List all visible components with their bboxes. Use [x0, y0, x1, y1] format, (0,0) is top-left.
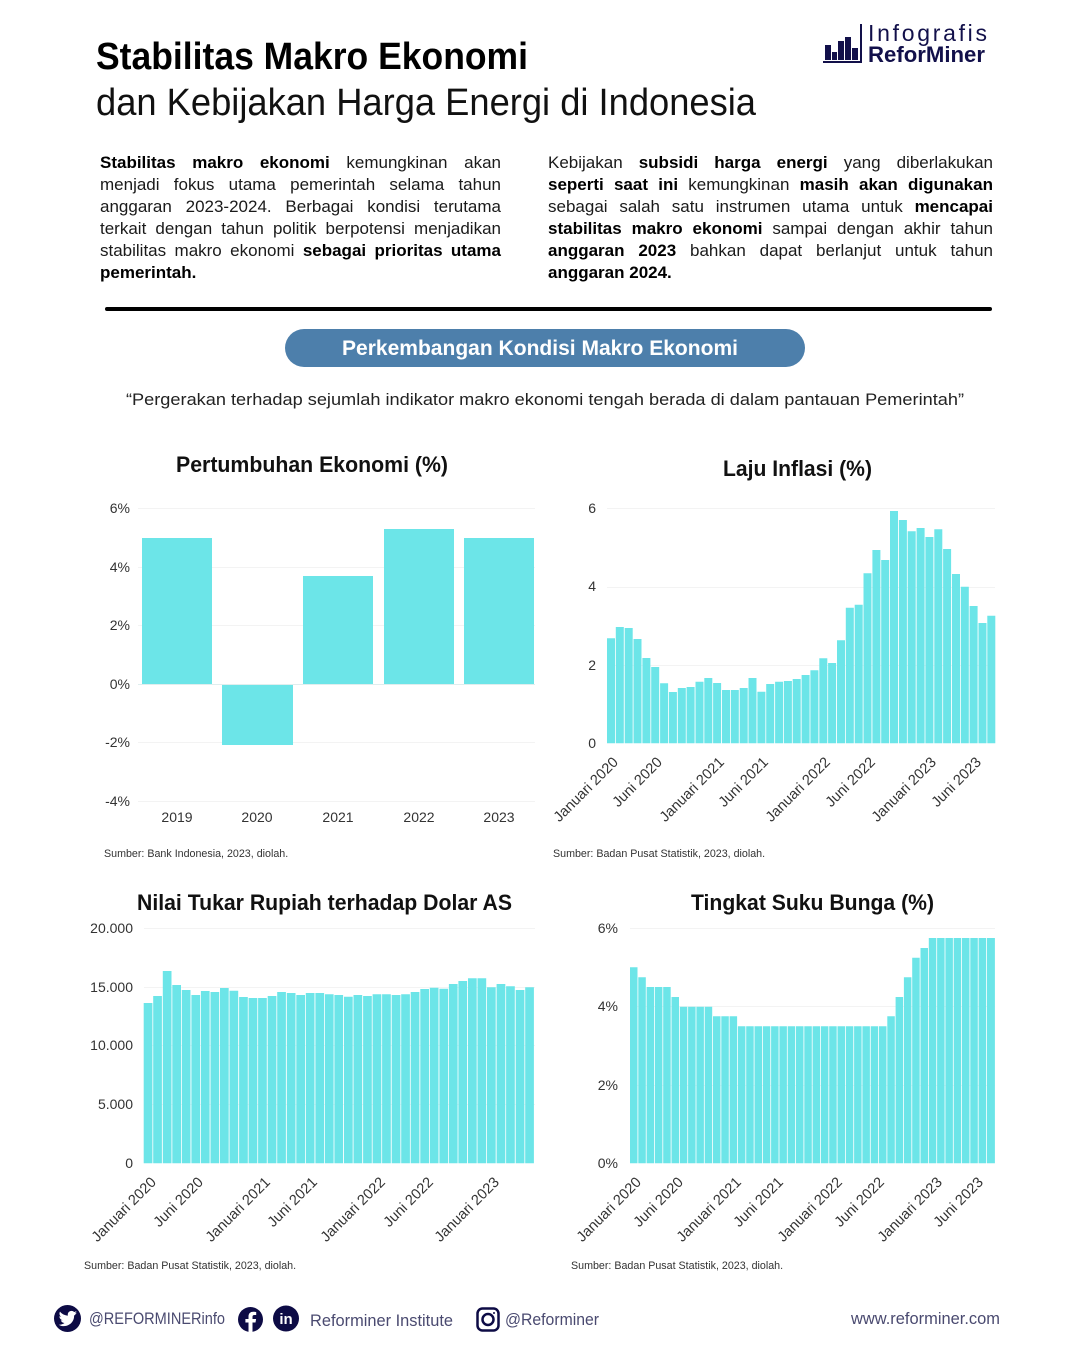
text block: left paragraph: menjadi fokus utama pemerintah selama tahun [100, 175, 501, 194]
text block: left paragraph: pemerintah. [100, 263, 196, 282]
logo: ReforMiner [823, 20, 987, 67]
x axis labels: Juni 2023 [929, 755, 985, 811]
handle: instagram: @Reforminer [505, 1310, 599, 1329]
y axis labels: 10.000 [90, 1037, 133, 1053]
bars [142, 529, 534, 745]
chart: Pertumbuhan Ekonomi [104, 452, 535, 860]
divider line [105, 307, 992, 311]
section subtitle quote: “Pergerakan terhadap sejumlah indikator makro ekonomi tengah berada di dalam pantauan Pemerintah” [126, 390, 964, 409]
chart: Nilai Tukar Rupiah [84, 890, 535, 1272]
x axis labels [551, 755, 985, 826]
y axis labels [90, 920, 133, 1171]
section heading pill [285, 329, 805, 367]
y axis labels: 6% [598, 920, 618, 936]
chart title: Tingkat Suku Bunga: Tingkat Suku Bunga (%) [691, 890, 934, 915]
x axis labels: Januari 2022 [775, 1175, 846, 1246]
x axis labels: 2019 [161, 809, 193, 825]
y axis labels: 5.000 [98, 1096, 133, 1112]
x axis labels [89, 1175, 503, 1246]
x axis labels: Juni 2020 [151, 1175, 207, 1231]
chart title: Pertumbuhan Ekonomi: Pertumbuhan Ekonomi (%) [176, 452, 448, 477]
x axis labels: Januari 2021 [203, 1175, 274, 1246]
x axis labels: Juni 2021 [716, 755, 772, 811]
x axis labels: 2022 [403, 809, 435, 825]
logo: ReforMiner: Infografis [868, 20, 987, 46]
y axis labels: 2 [588, 657, 596, 673]
x axis labels: Januari 2023 [432, 1175, 503, 1246]
x axis labels: 2021 [322, 809, 354, 825]
text block: right paragraph: seperti saat ini kemungkinan masih akan digunakan [548, 175, 993, 194]
y axis labels [105, 500, 130, 809]
source: Sumber: Bank Indonesia, 2023, diolah. [104, 848, 288, 860]
y axis labels [598, 920, 618, 1171]
icon: linkedin: in [279, 1311, 293, 1328]
y axis labels: 6 [588, 500, 596, 516]
icon: twitter [54, 1305, 81, 1332]
icon: facebook [238, 1307, 263, 1332]
x axis labels: Januari 2023 [875, 1175, 946, 1246]
x axis labels: Juni 2020 [631, 1175, 687, 1231]
text block: right paragraph: anggaran 2023 bahkan dapat berlanjut untuk tahun [548, 241, 993, 260]
x axis labels: Januari 2020 [574, 1175, 645, 1246]
y axis labels [588, 500, 596, 751]
chart: Laju Inflasi [551, 456, 995, 860]
icon: linkedin [273, 1306, 299, 1332]
x axis labels: Juni 2023 [931, 1175, 987, 1231]
title: dan Kebijakan Harga Energi di Indonesia [96, 82, 757, 124]
x axis labels [161, 809, 515, 825]
y axis labels: 15.000 [90, 979, 133, 995]
chart title: Laju Inflasi: Laju Inflasi (%) [723, 456, 872, 481]
text block: right paragraph: stabilitas makro ekonomi sampai dengan akhir tahun [548, 219, 993, 238]
x axis labels: Juni 2022 [823, 755, 879, 811]
text block: left paragraph: anggaran 2023-2024. Berbagai kondisi terutama [100, 197, 501, 216]
x axis labels: Januari 2020 [89, 1175, 160, 1246]
chart title: Nilai Tukar Rupiah: Nilai Tukar Rupiah terhadap Dolar AS [137, 890, 512, 915]
y axis labels: 2% [110, 617, 130, 633]
x axis labels: Januari 2021 [674, 1175, 745, 1246]
bars [607, 511, 995, 743]
text block: right paragraph: sebagai salah satu instrumen utama untuk mencapai [548, 197, 993, 216]
text block: right paragraph: Kebijakan subsidi harga energi yang diberlakukan [548, 153, 993, 172]
x axis labels: Juni 2021 [731, 1175, 787, 1231]
text block: left paragraph: stabilitas makro ekonomi sebagai prioritas utama [100, 241, 501, 260]
y axis labels: 0 [588, 735, 596, 751]
chart: Tingkat Suku Bunga [571, 890, 995, 1272]
y axis labels: 0 [125, 1155, 133, 1171]
handle: linkedin: Reforminer Institute [310, 1311, 453, 1330]
x axis labels [574, 1175, 987, 1246]
bars [144, 971, 534, 1163]
y axis labels: -2% [105, 734, 130, 750]
title [96, 36, 757, 124]
x axis labels: Januari 2022 [763, 755, 834, 826]
source: Sumber: Badan Pusat Statistik, 2023, diolah. [571, 1260, 783, 1272]
x axis labels: 2020 [241, 809, 273, 825]
y axis labels: 2% [598, 1077, 618, 1093]
bars [630, 938, 995, 1163]
source: Sumber: Badan Pusat Statistik, 2023, diolah. [84, 1260, 296, 1272]
text block: left paragraph [100, 153, 502, 282]
x axis labels: Januari 2021 [657, 755, 728, 826]
x axis labels: Juni 2022 [381, 1175, 437, 1231]
x axis labels: Juni 2022 [832, 1175, 888, 1231]
source: Sumber: Badan Pusat Statistik, 2023, diolah. [553, 848, 765, 860]
x axis labels: Juni 2020 [610, 755, 666, 811]
x axis labels: Januari 2023 [869, 755, 940, 826]
y axis labels: 0% [598, 1155, 618, 1171]
website: www.reforminer.com [850, 1309, 1000, 1328]
y axis labels: 4 [588, 578, 596, 594]
text block: left paragraph: terkait dengan tahun politik berpotensi menjadikan [100, 219, 501, 238]
y axis labels: 4% [110, 559, 130, 575]
text block: left paragraph: Stabilitas makro ekonomi kemungkinan akan [100, 153, 501, 172]
icon: instagram [478, 1308, 498, 1330]
text block: right paragraph: anggaran 2024. [548, 263, 672, 282]
x axis labels: Januari 2020 [551, 755, 622, 826]
y axis labels: -4% [105, 793, 130, 809]
y axis labels: 20.000 [90, 920, 133, 936]
text block: right paragraph [548, 153, 993, 282]
title: Stabilitas Makro Ekonomi [96, 36, 528, 78]
y axis labels: 4% [598, 998, 618, 1014]
footer [54, 1305, 1000, 1332]
x axis labels: 2023 [483, 809, 515, 825]
y axis labels: 0% [110, 676, 130, 692]
y axis labels: 6% [110, 500, 130, 516]
section heading pill: Perkembangan Kondisi Makro Ekonomi [342, 337, 738, 360]
x axis labels: Juni 2021 [265, 1175, 321, 1231]
handle: twitter: @REFORMINERinfo [89, 1309, 225, 1328]
logo: ReforMiner: ReforMiner [868, 42, 985, 67]
x axis labels: Januari 2022 [318, 1175, 389, 1246]
